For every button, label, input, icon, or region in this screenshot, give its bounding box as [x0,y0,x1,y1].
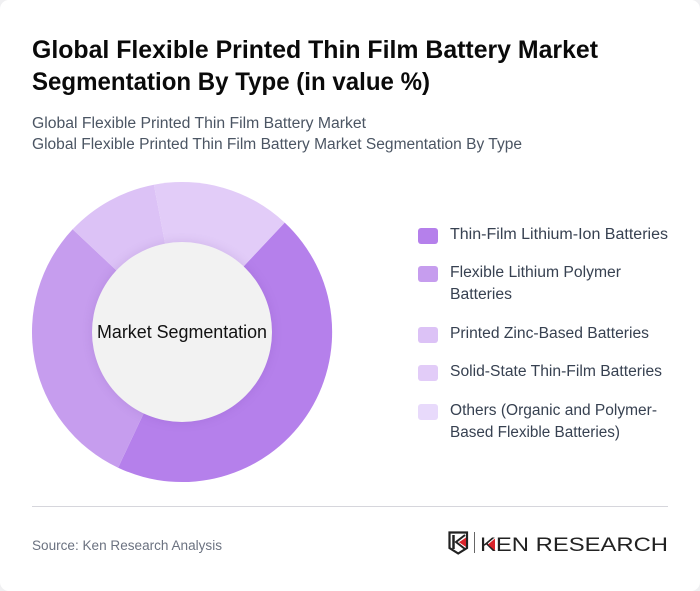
legend item: Solid-State Thin-Film Batteries: Solid-State Thin-Film Batteries [450,363,662,380]
legend item: Flexible Lithium Polymer Batteries: Batteries [450,286,512,303]
legend item: Others: Based Flexible Batteries) [450,424,620,441]
legend item: Flexible Lithium Polymer Batteries [418,264,621,303]
wordmark: KEN RESEARCH [480,535,668,556]
donut centre [92,242,272,422]
title: Global Flexible Printed Thin Film Battery Market [32,36,599,64]
segment: Thin-Film Lithium-Ion Batteries [118,223,332,482]
legend [418,226,668,441]
legend item: Flexible Lithium Polymer Batteries: Flexible Lithium Polymer [450,264,621,281]
title [32,36,599,96]
legend item: Others: Others (Organic and Polymer- [450,402,657,419]
legend item: Thin-Film Lithium-Ion Batteries: Thin-Film Lithium-Ion Batteries [450,226,668,243]
donut chart [32,182,332,482]
legend item: Others [418,402,657,441]
subtitle: Global Flexible Printed Thin Film Battery Market Segmentation By Type [32,136,522,153]
centre label: Market Segmentation [97,322,267,342]
logo: Ken Research [450,532,668,556]
legend item: Printed Zinc-Based Batteries: Printed Zinc-Based Batteries [450,325,649,342]
subtitle [32,115,522,153]
segment: Solid-State Thin-Film Batteries [154,182,285,332]
segment: Flexible Lithium Polymer Batteries [32,229,182,468]
source note: Source: Ken Research Analysis [32,538,222,553]
icon: shield [450,532,467,554]
title: Segmentation By Type (in value %) [32,68,430,96]
subtitle: Global Flexible Printed Thin Film Battery Market [32,115,367,132]
segment: Printed Zinc-Based Batteries [73,185,182,332]
